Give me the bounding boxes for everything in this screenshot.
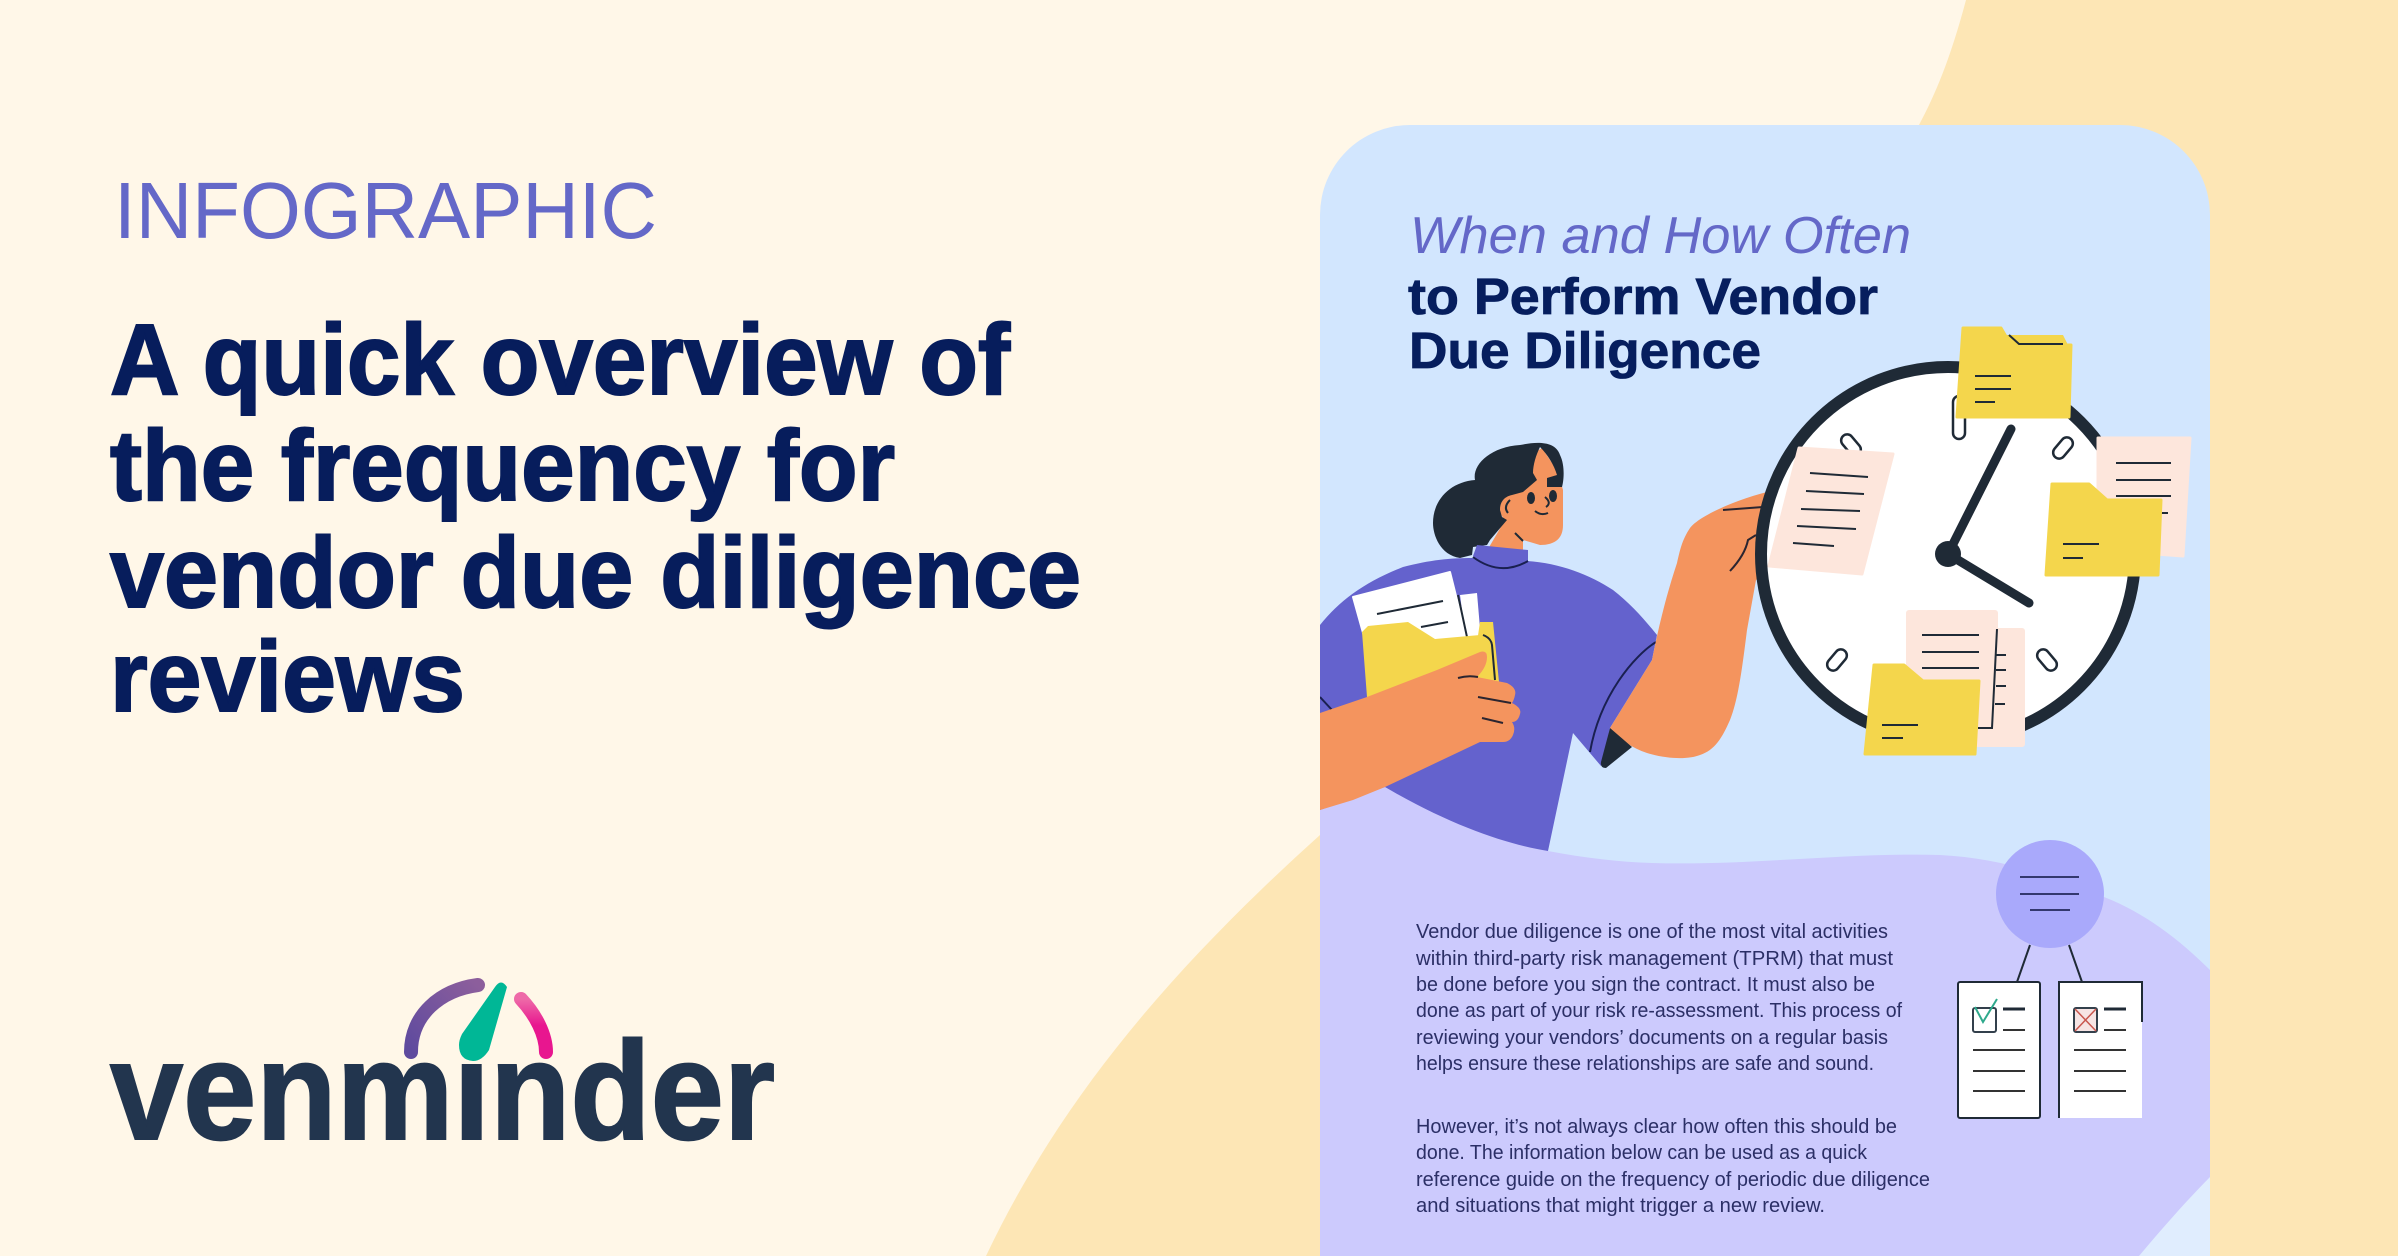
card title	[1408, 207, 1911, 379]
headline: vendor due diligence	[110, 517, 1081, 629]
sleeve tip	[1601, 728, 1632, 768]
card title: to Perform Vendor	[1408, 268, 1878, 325]
body text: reference guide on the frequency of periodic due diligence	[1416, 1168, 1930, 1191]
eyebrow: INFOGRAPHIC: INFOGRAPHIC	[114, 166, 657, 255]
note: bottom papers and folder	[1865, 610, 2025, 754]
hair	[1433, 443, 1564, 558]
right arm	[1610, 490, 1775, 758]
lavender wave	[1320, 760, 2212, 1256]
body text: Vendor due diligence is one of the most vital activities	[1416, 920, 1888, 943]
body text	[1415, 920, 1930, 1217]
eyes and smile	[1527, 492, 1535, 504]
body text: However, it’s not always clear how often this should be	[1416, 1115, 1897, 1138]
collar	[1473, 545, 1528, 561]
body	[1320, 558, 1657, 851]
note: top folder	[1957, 328, 2071, 417]
background blob	[986, 0, 2398, 1256]
illustration: woman with folder	[1320, 443, 1775, 851]
headline: the frequency for	[110, 410, 895, 522]
body text: be done before you sign the contract. It must also be	[1416, 973, 1875, 996]
headline	[110, 304, 1081, 733]
logo: venminder: venminder	[110, 1012, 775, 1169]
note: right paper and folder	[2046, 438, 2190, 575]
body text: done. The information below can be used as a quick	[1416, 1141, 1868, 1164]
face	[1488, 448, 1563, 552]
body text: within third-party risk management (TPRM) that must	[1415, 947, 1893, 970]
papers in folder	[1460, 593, 1480, 636]
folder	[1478, 622, 1499, 682]
card title: When and How Often	[1410, 207, 1911, 265]
diagram: vendor documents	[1958, 840, 2142, 1118]
document with cross	[2059, 982, 2142, 1118]
body text: reviewing your vendors’ documents on a regular basis	[1416, 1026, 1888, 1049]
headline: reviews	[110, 621, 465, 733]
left arm	[1320, 652, 1520, 810]
body text: and situations that might trigger a new review.	[1416, 1194, 1825, 1217]
panel: infographic card	[1320, 125, 2212, 1256]
headline: A quick overview of	[110, 304, 1011, 416]
body text: helps ensure these relationships are safe and sound.	[1416, 1052, 1874, 1075]
illustration: clock	[1761, 367, 2135, 741]
document with check	[1958, 982, 2040, 1118]
note: left paper	[1769, 448, 1893, 574]
card title: Due Diligence	[1409, 322, 1761, 379]
body text: done as part of your risk re-assessment. This process of	[1416, 999, 1902, 1022]
